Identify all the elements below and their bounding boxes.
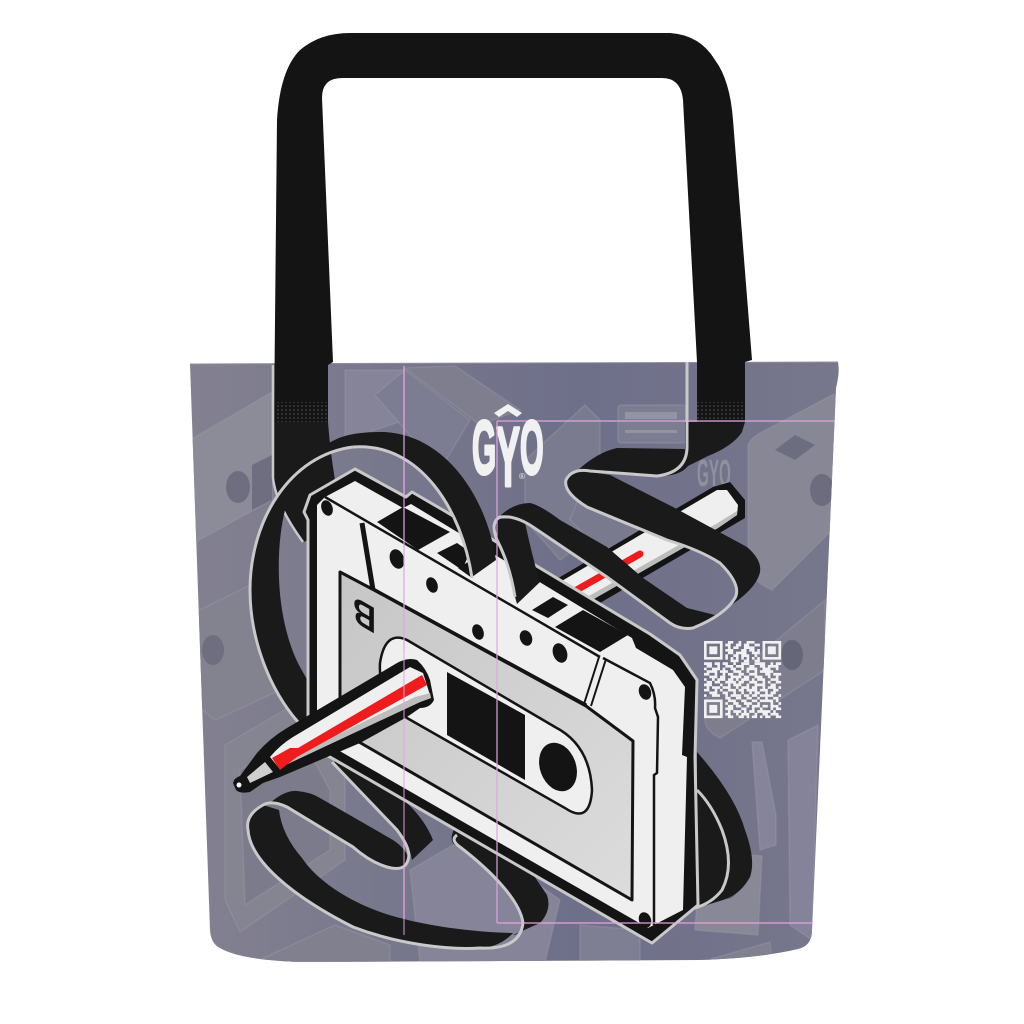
cassette top slots (377, 507, 628, 652)
cassette (304, 469, 698, 943)
ribbon from left handle behind cassette (273, 365, 345, 542)
logo: GYO: Y (496, 409, 520, 504)
cassette label band lines (325, 497, 600, 657)
side B letter: B (353, 588, 376, 642)
background cassette pattern: GYO (697, 453, 731, 495)
right tape loop (695, 752, 752, 908)
cassette body white surface (317, 481, 687, 928)
light tape edge line (494, 362, 737, 628)
QR code (704, 641, 781, 718)
tote bag body (190, 362, 839, 965)
pencil through cassette hub (233, 659, 434, 793)
tape over cassette top and upper S curves (353, 362, 760, 628)
cassette black window (447, 672, 525, 780)
magenta guide lines back (404, 366, 835, 935)
band sweeping right (566, 470, 760, 628)
logo: GYO: ® (519, 472, 525, 481)
big tape loop behind cassette (250, 432, 496, 722)
cassette grey panel (340, 572, 633, 900)
cassette window capsule (380, 638, 592, 814)
upper pencil end (555, 482, 745, 607)
tote bag black handles (274, 33, 752, 422)
cassette screws and holes (319, 499, 653, 930)
lower tape loops (248, 760, 548, 948)
cassette outer silhouette (304, 469, 698, 943)
magenta guide lines front (404, 366, 812, 935)
band returning to cassette (497, 503, 715, 628)
logo: GYO (472, 404, 544, 504)
band into cassette slot (494, 518, 540, 604)
logo: GYO: G (472, 406, 496, 491)
band from right handle (578, 422, 745, 476)
background cassette pattern (190, 366, 838, 965)
logo: GYO: O (520, 407, 544, 491)
cassette spool hole (533, 737, 583, 797)
